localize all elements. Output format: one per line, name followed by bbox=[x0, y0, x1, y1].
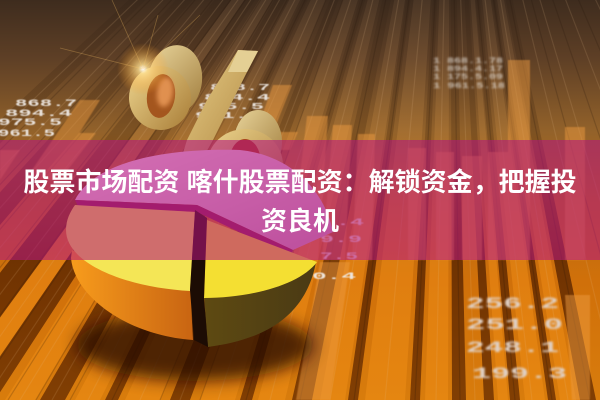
pie slice: left bbox=[66, 205, 195, 340]
pie slice: right bbox=[204, 220, 317, 347]
number block: upper right: 1 961.5.18 bbox=[433, 82, 505, 91]
number block: lower right: 251.0 bbox=[466, 316, 563, 334]
number block: behind percent sign: 868.7 bbox=[210, 83, 270, 93]
number block: behind percent sign: 961.5 bbox=[195, 111, 261, 121]
number block: upper left: 868.7 bbox=[15, 99, 77, 110]
pie slice: back bbox=[75, 150, 333, 256]
number block: upper right bbox=[433, 57, 505, 91]
light flare bbox=[60, 0, 200, 95]
number block: behind percent sign bbox=[195, 83, 271, 121]
number block: center right: .4 bbox=[336, 218, 364, 229]
number block: lower right: 248.1 bbox=[466, 339, 559, 357]
percent sign: upper ring bbox=[126, 42, 207, 133]
number block: upper left bbox=[0, 99, 77, 140]
number block: behind percent sign: 975.5 bbox=[198, 102, 264, 112]
percent sign: slash bbox=[170, 50, 258, 195]
percent sign: lower ring bbox=[207, 110, 283, 201]
number block: center right: 9.9 bbox=[320, 235, 362, 246]
pink title band bbox=[0, 140, 600, 260]
pie chart bbox=[66, 150, 333, 347]
pie gap bbox=[190, 210, 208, 347]
number block: upper left: 894.4 bbox=[5, 109, 72, 120]
number block: upper right: 1 868.1.78 bbox=[433, 57, 503, 66]
title: 股票市场配资 喀什股票配资：解锁资金，把握投资良机 bbox=[23, 167, 577, 236]
number block: upper right: 1 894.4.17 bbox=[433, 65, 503, 74]
number block: center right bbox=[312, 218, 364, 283]
number block: lower right bbox=[466, 295, 567, 383]
number block: behind percent sign: 894.4 bbox=[204, 93, 271, 103]
number block: lower right: 256.2 bbox=[466, 295, 559, 313]
number block: center right: 0.4 bbox=[312, 272, 356, 283]
icon: golden percent sign bbox=[60, 0, 283, 201]
number block: center right: 7.5 bbox=[320, 252, 358, 263]
pie chart shadow bbox=[77, 309, 313, 381]
number block: lower right: 199.3 bbox=[472, 365, 567, 383]
number block: upper right: 1 175.5.09 bbox=[433, 73, 503, 82]
